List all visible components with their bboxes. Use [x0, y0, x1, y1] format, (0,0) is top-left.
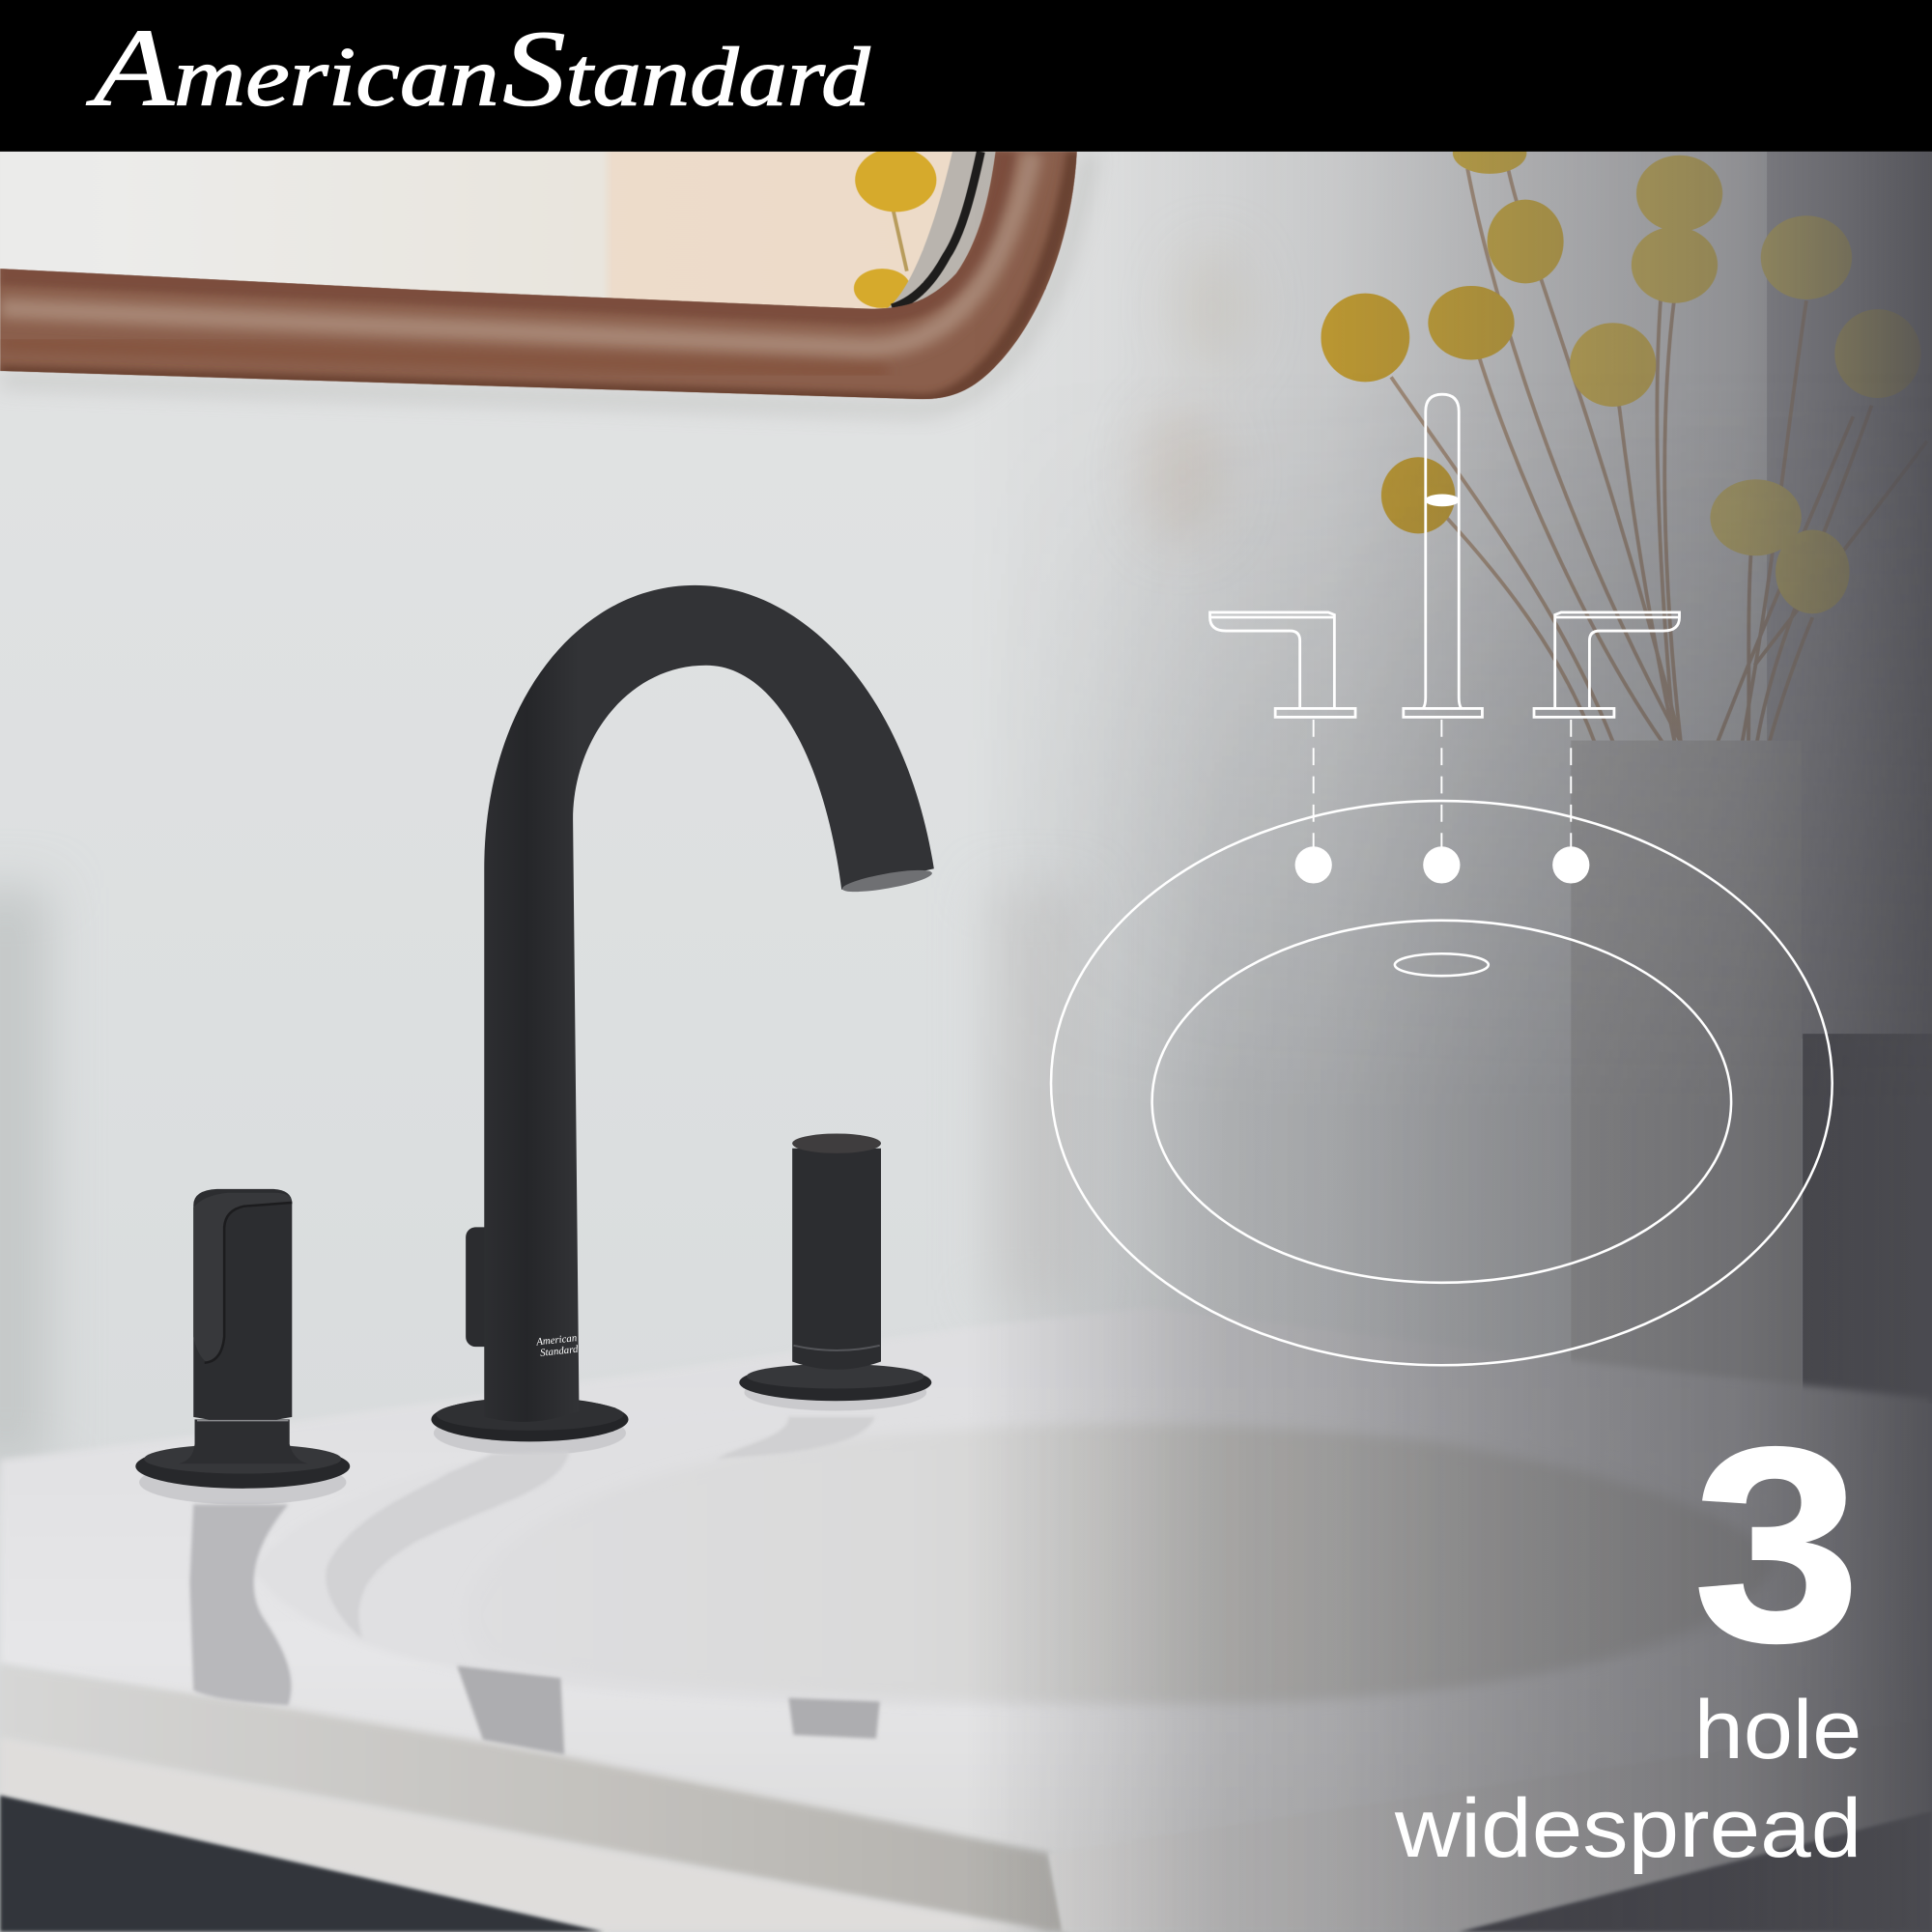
- header bar: [0, 0, 1932, 152]
- label: widespread: widespread: [1394, 1781, 1861, 1875]
- small brand mark: American: [535, 1332, 578, 1349]
- plant flowers: [1321, 131, 1921, 613]
- spout base: [431, 1397, 629, 1441]
- counter top: [0, 1307, 1932, 1853]
- mirror shadow on wall: [0, 152, 1091, 409]
- pop-up lever: [466, 1227, 496, 1347]
- small brand mark: [535, 1332, 580, 1359]
- plant stems: [1391, 169, 1927, 742]
- outer basin lip: [254, 1405, 1824, 1707]
- lower right extra shading: [1017, 532, 1909, 1932]
- icon: sink bowl: [1152, 921, 1731, 1283]
- counter front edge upper band: [0, 1664, 1067, 1932]
- icon: sink overflow: [1395, 953, 1489, 976]
- headline number: 3: [1693, 1391, 1861, 1699]
- mirror reflected stem: [894, 211, 907, 271]
- mirror inner reflective edge: [886, 152, 996, 309]
- far wall corner: [1767, 152, 1932, 1038]
- vase: [1571, 741, 1802, 1394]
- base reflections: [139, 1374, 926, 1504]
- mirror wood frame: [0, 152, 1084, 404]
- mirror glass: [0, 152, 1005, 318]
- dark back wall panel: [1803, 1034, 1932, 1404]
- icon: left handle outline: [1210, 612, 1355, 717]
- logo: American: [86, 6, 499, 128]
- diagram: three-hole faucet and sink: [1051, 394, 1833, 1365]
- counter corner and right front: [1048, 1719, 1932, 1932]
- faucet reflections: [189, 1417, 880, 1754]
- dashed guides: [1314, 720, 1571, 850]
- mirror reflection flowers: [854, 148, 936, 308]
- icon: three mounting holes: [1295, 846, 1589, 884]
- faucet: left handle: [135, 1189, 350, 1489]
- cabinet left: [0, 1795, 604, 1932]
- label: hole: hole: [1694, 1683, 1861, 1776]
- faucet: center spout: [431, 585, 934, 1441]
- aerator: [841, 866, 933, 896]
- cabinet right: [1459, 1811, 1932, 1932]
- small brand mark: Standard: [540, 1344, 580, 1359]
- icon: sink outer rim: [1051, 801, 1833, 1365]
- logo: [86, 6, 870, 128]
- mirror inner dark line: [892, 152, 980, 308]
- icon: spout outline: [1404, 394, 1482, 717]
- wall shadows: [0, 246, 1249, 1466]
- counter front edge lower band: [0, 1737, 1047, 1932]
- faucet: right handle: [739, 1133, 931, 1401]
- logo: Standard: [502, 9, 870, 128]
- basin: [466, 1424, 1775, 1703]
- spout body: [484, 585, 934, 1422]
- icon: right handle outline: [1534, 612, 1680, 717]
